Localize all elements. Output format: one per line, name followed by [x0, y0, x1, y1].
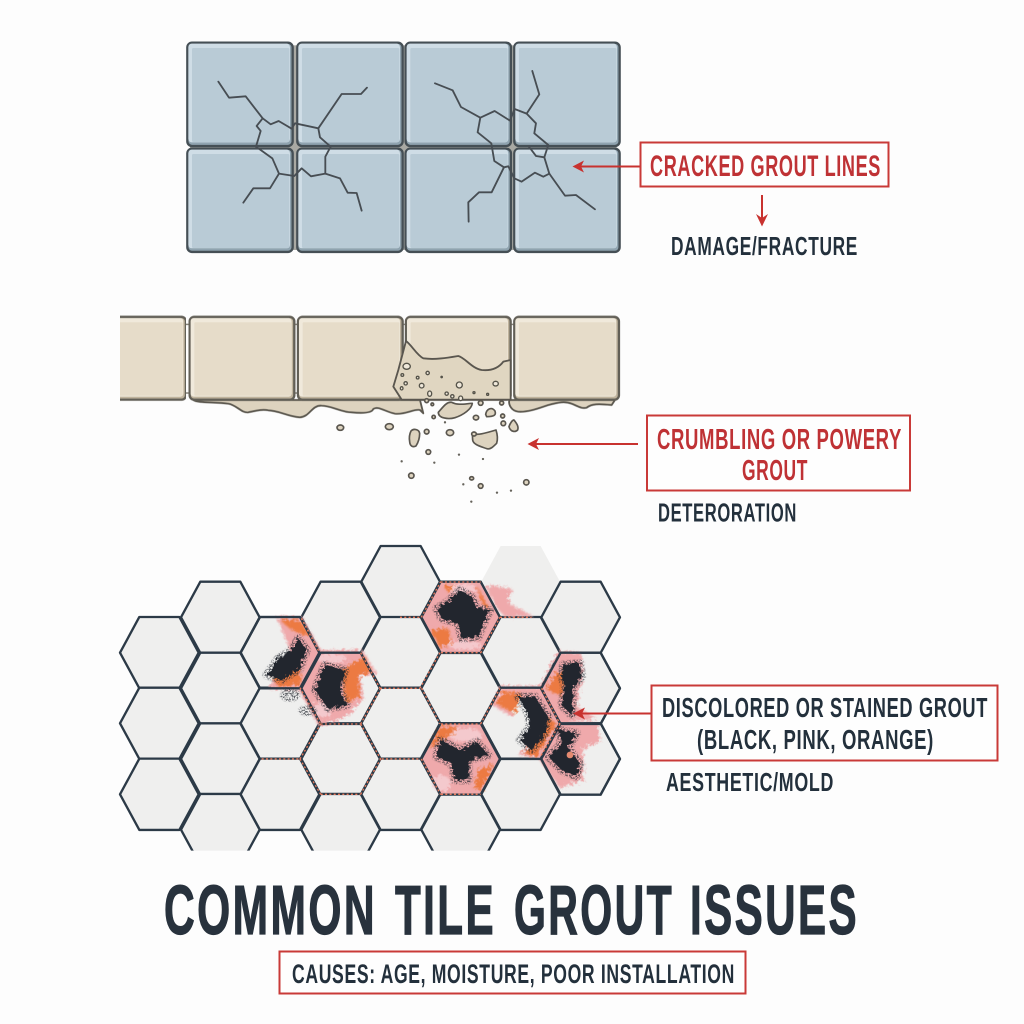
label: damage/fracture: DAMAGE/FRACTURE: [671, 231, 858, 261]
arrow: down to damage label: [756, 195, 768, 226]
hex grid: [120, 546, 620, 865]
arrow: to crumbling label: [528, 438, 638, 450]
callout: cracked grout lines: [640, 142, 888, 186]
callout: crumbling grout: GROUT: [742, 455, 808, 487]
callout: causes: CAUSES: AGE, MOISTURE, POOR INSTALLATION: [292, 959, 735, 989]
title: [164, 871, 859, 949]
tile grid: [187, 43, 620, 252]
tile row: [81, 317, 619, 400]
faded hex: [481, 546, 560, 617]
pink spot: [567, 752, 573, 758]
label: aesthetic/mold: AESTHETIC/MOLD: [666, 767, 834, 797]
pale pink patches: [312, 583, 482, 791]
panel: cracked blue tiles: [187, 43, 620, 252]
panel: stained hexagon tiles: [120, 546, 620, 865]
pink stains: [268, 582, 600, 795]
joint lines: [183, 324, 517, 393]
crack lines: [218, 71, 595, 222]
callout: crumbling grout: [647, 416, 910, 490]
label: deterioration: DETERORATION: [658, 498, 797, 528]
title: ISSUES: [690, 871, 859, 949]
callout: causes: [280, 952, 746, 994]
title: COMMON: [164, 871, 377, 949]
callout: discolored grout: [652, 686, 998, 760]
orange stains: [272, 585, 565, 790]
title: GROUT: [514, 871, 674, 949]
black mold blotches: [267, 590, 582, 780]
arrow: to stained label: [573, 708, 651, 720]
arrow: to cracked label: [572, 160, 640, 172]
dust dots: [400, 421, 512, 503]
crumbled tile section: [393, 341, 511, 400]
callout: cracked grout lines: CRACKED GROUT LINES: [650, 150, 881, 183]
title: TILE: [395, 871, 496, 949]
mold speckled halo: [267, 590, 582, 780]
panel: crumbling beige tiles: [81, 317, 619, 503]
underside grout: [193, 400, 615, 417]
stained grout joints: [262, 582, 560, 795]
pits in crumbled section: [400, 363, 498, 401]
stained hex outlines: [241, 582, 620, 795]
falling fragments: [337, 399, 529, 488]
